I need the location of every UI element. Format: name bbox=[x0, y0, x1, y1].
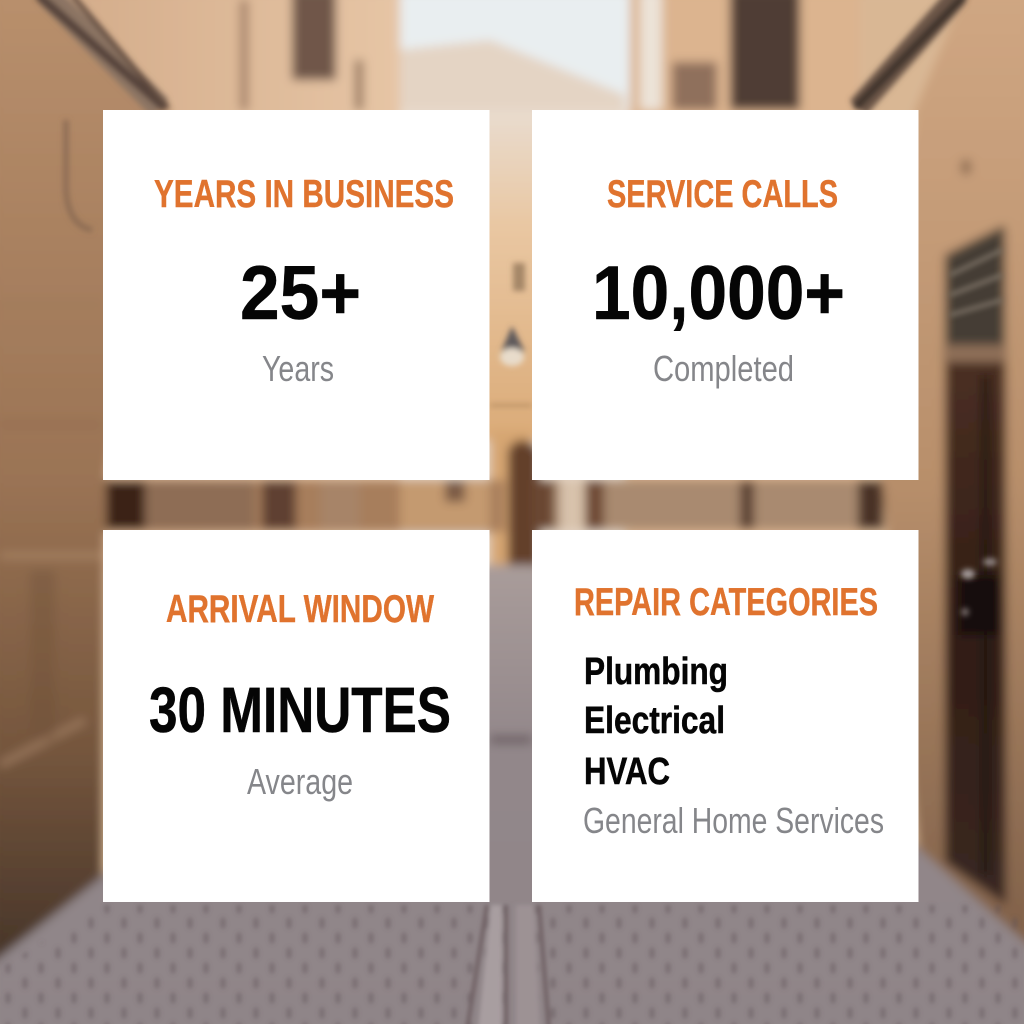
left wall bbox=[0, 0, 170, 965]
right wall bbox=[882, 0, 1024, 950]
cobbles bbox=[0, 905, 1024, 1024]
caption: completed: Completed bbox=[653, 348, 794, 389]
list item: hvac: HVAC bbox=[584, 751, 670, 793]
list item: electrical: Electrical bbox=[584, 700, 725, 742]
heading: repair categories: REPAIR CATEGORIES bbox=[574, 581, 878, 624]
heading: arrival window: ARRIVAL WINDOW bbox=[166, 588, 434, 631]
panel: service calls bbox=[532, 110, 918, 480]
panel: years in business bbox=[103, 110, 490, 480]
caption: average: Average bbox=[247, 761, 353, 802]
caption: years: Years bbox=[262, 348, 334, 389]
ground bbox=[0, 565, 1024, 1024]
heading: service calls: SERVICE CALLS bbox=[607, 173, 838, 216]
list item: general home services: General Home Services bbox=[583, 800, 884, 841]
panel: arrival window bbox=[103, 530, 490, 902]
value: 25+: 25+ bbox=[240, 251, 361, 336]
panel: repair categories bbox=[532, 530, 918, 902]
value: 30 minutes: 30 MINUTES bbox=[149, 674, 451, 746]
heading: years in business: YEARS IN BUSINESS bbox=[154, 173, 454, 216]
list item: plumbing: Plumbing bbox=[584, 651, 728, 693]
value: 10,000+: 10,000+ bbox=[592, 251, 845, 336]
door bbox=[945, 362, 1006, 905]
band between upper and lower cards bbox=[104, 480, 504, 532]
